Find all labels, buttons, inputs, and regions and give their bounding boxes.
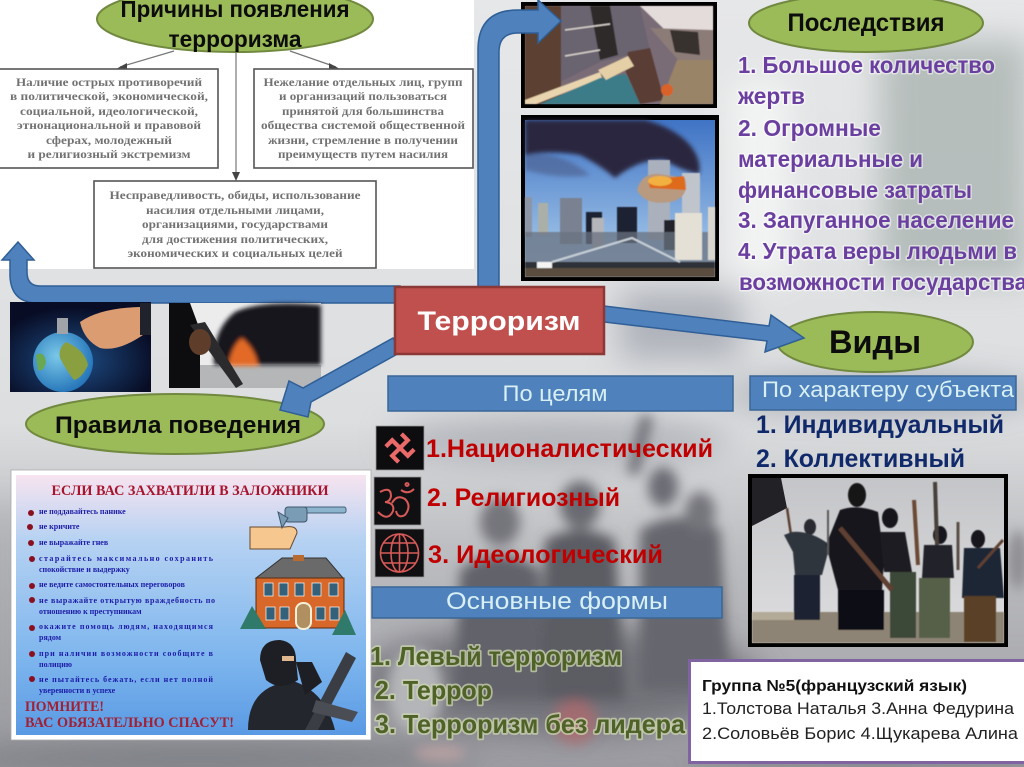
cause box: left — [0, 69, 218, 168]
photo: armed militants — [748, 474, 1008, 647]
consequences list — [737, 52, 1024, 295]
central box: Terrorism — [395, 287, 604, 354]
cause box: left: Наличие острых противоречий — [16, 76, 202, 89]
cause box: right: Нежелание отдельных лиц, групп — [264, 76, 463, 89]
list: goal types: 3. Идеологический — [428, 541, 663, 569]
consequences list: 4. Утрата веры людьми в — [738, 238, 1017, 264]
panel: causes of terrorism — [0, 0, 474, 269]
poster rules text: при наличии возможности сообщите в — [39, 649, 214, 658]
photo: subway attack — [521, 2, 717, 108]
arrow: to rules of behaviour — [280, 338, 401, 417]
flag — [752, 478, 787, 526]
heading oval: types: Виды — [829, 324, 921, 360]
poster bullets — [27, 510, 35, 682]
poster rules text: окажите помощь людям, находящимся — [39, 622, 214, 631]
list: subject types — [756, 411, 1004, 473]
cause box: left: этнонациональной и правовой — [17, 119, 201, 132]
poster rules text: не выражайте открытую враждебность по — [39, 596, 215, 605]
panel: group credits — [690, 660, 1024, 762]
bar: by subject — [750, 376, 1016, 410]
poster call to action: ВАС ОБЯЗАТЕЛЬНО СПАСУТ! — [25, 715, 234, 731]
list: forms: 1. Левый терроризм — [370, 641, 622, 671]
poster rules text: спокойствие и выдержку — [39, 565, 130, 574]
heading oval: rules of behaviour — [26, 394, 324, 454]
icon: om symbol — [374, 477, 421, 525]
list: subject types: 2. Коллективный — [756, 445, 965, 473]
consequences list: 3. Запуганное население — [738, 207, 1014, 233]
panel: group credits: 1.Толстова Наталья 3.Анна Федурина — [702, 699, 1015, 718]
icon: nationalist symbol — [376, 426, 424, 470]
poster call to action: ПОМНИТЕ! — [25, 699, 104, 715]
illustration: masked gunman — [248, 640, 358, 730]
cause box: left: сферах, молодежный — [46, 134, 172, 147]
panel: group credits: 2.Соловьёв Борис 4.Щукарева Алина — [702, 724, 1019, 743]
cause box: right: общества системой общественной — [261, 119, 465, 132]
heading oval: types — [777, 312, 973, 372]
cause box: left: социальной, идеологической, — [20, 105, 198, 118]
panel: group credits: Группа №5(французский язык) — [702, 678, 967, 695]
heading oval: rules of behaviour: Правила поведения — [55, 412, 301, 439]
cause connectors — [116, 50, 340, 181]
consequences list: 2. Огромные — [738, 115, 881, 141]
arrow: to causes (left, up) — [2, 242, 400, 303]
cause box: right: принятой для большинства — [282, 105, 444, 118]
cause box: bottom: экономических и социальных целей — [128, 247, 343, 260]
photo: hand with grenade over globe — [10, 302, 151, 392]
heading oval: consequences: Последствия — [788, 9, 944, 37]
list: forms: 2. Террор — [375, 675, 492, 705]
list: goal types: 2. Религиозный — [427, 484, 620, 512]
bar: main forms: Основные формы — [446, 588, 668, 615]
consequences list: 1. Большое количество — [738, 52, 995, 78]
bar: by goals: По целям — [502, 381, 608, 406]
illustration: hand with revolver — [250, 507, 346, 549]
bar: by subject: По характеру субъекта — [762, 377, 1015, 402]
list: subject types: 1. Индивидуальный — [756, 411, 1004, 439]
poster rules text: не выражайте гнев — [39, 538, 109, 547]
bar: by goals — [388, 376, 733, 411]
list: goal types: 1.Националистический — [426, 435, 713, 463]
consequences list: жертв — [737, 83, 805, 109]
cause box: left: и религиозный экстремизм — [28, 148, 191, 161]
poster rules text: уверенности в успехе — [39, 686, 116, 695]
poster rules text: полицию — [39, 660, 72, 669]
cause box: bottom — [94, 181, 376, 268]
poster rules text: старайтесь максимально сохранить — [39, 554, 214, 563]
poster rules text — [39, 507, 215, 695]
illustration: house — [240, 555, 356, 635]
icon: globe — [375, 529, 424, 577]
heading oval: causes — [97, 0, 373, 52]
poster rules text: не поддавайтесь панике — [39, 507, 126, 516]
list: forms — [370, 641, 686, 739]
poster call to action — [25, 699, 234, 731]
group of militants — [752, 482, 1004, 643]
cause box: bottom: для достижения политических, — [142, 233, 328, 246]
poster rules text: рядом — [39, 633, 62, 642]
bar: main forms — [372, 587, 722, 618]
photo: burning twin towers — [521, 115, 719, 281]
panel: hostage rules poster — [11, 470, 371, 740]
cause box: right: преимуществ путем насилия — [278, 148, 449, 161]
arrow: to types — [604, 306, 804, 352]
cause box: bottom: насилия отдельными лицами, — [146, 204, 324, 217]
cause box: right: жизни, стремление в получении — [268, 134, 458, 147]
cause box: right: и организаций пользоваться — [279, 90, 448, 103]
photo: gunman and burning smoke — [169, 303, 321, 388]
cause box: left: в политической, экономической, — [10, 90, 208, 103]
poster rules text: не ведите самостоятельных переговоров — [39, 580, 186, 589]
cause box: right — [254, 69, 473, 168]
poster title: ЕСЛИ ВАС ЗАХВАТИЛИ В ЗАЛОЖНИКИ — [52, 483, 329, 499]
poster rules text: не кричите — [39, 522, 80, 531]
list: goal types — [426, 435, 713, 569]
consequences list: финансовые затраты — [738, 177, 972, 203]
heading oval: consequences — [749, 0, 983, 52]
poster rules text: отношению к преступникам — [39, 607, 142, 616]
cause box: bottom: организациями, государствами — [142, 218, 328, 231]
central box: Terrorism: Терроризм — [418, 306, 580, 336]
cause box: bottom: Несправедливость, обиды, использование — [110, 189, 360, 202]
consequences list: материальные и — [738, 146, 923, 172]
arrow: to consequences (up, right) — [478, 0, 561, 290]
heading oval: causes: терроризма — [168, 26, 302, 52]
poster rules text: не пытайтесь бежать, если нет полной — [39, 675, 213, 684]
list: forms: 3. Терроризм без лидера — [375, 709, 686, 739]
